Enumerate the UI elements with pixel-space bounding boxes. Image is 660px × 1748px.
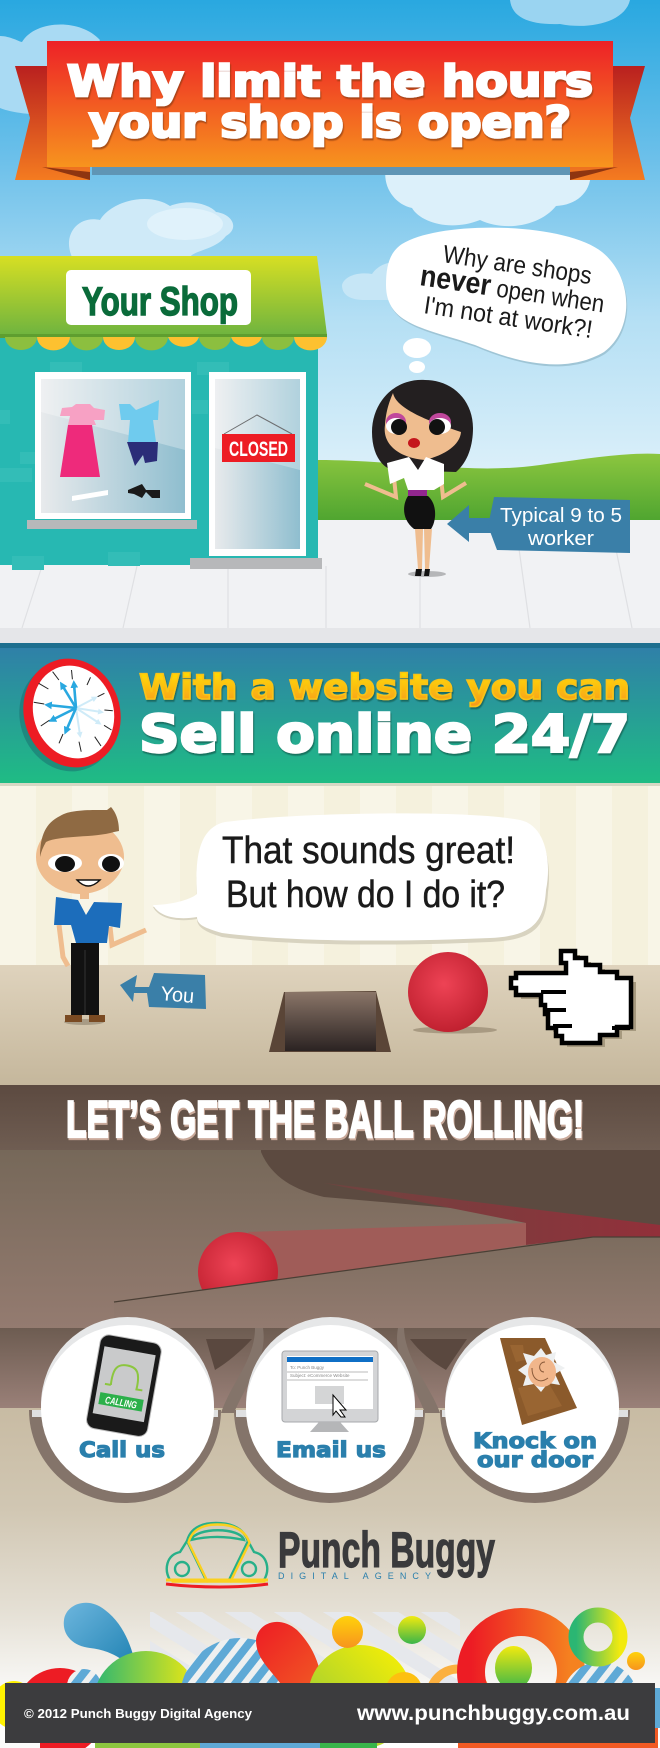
speech bubble bbox=[153, 813, 549, 945]
thought text: I'm not at work?! bbox=[422, 291, 594, 344]
icon: phone bbox=[85, 1334, 163, 1438]
icon: door with fist bbox=[500, 1338, 577, 1425]
decorative colourful shapes bbox=[0, 1603, 660, 1748]
section: get the ball rolling bbox=[0, 1085, 660, 1748]
callout: you bbox=[120, 973, 206, 1009]
grass hill bbox=[318, 454, 660, 525]
thought text: Why are shops bbox=[441, 240, 594, 290]
heading: Why limit the hours bbox=[67, 57, 593, 107]
icon: pixel hand cursor bbox=[511, 951, 636, 1047]
label: knock on our door: our door bbox=[477, 1448, 594, 1472]
speech text: That sounds great! bbox=[222, 830, 515, 872]
red ball bbox=[408, 952, 497, 1034]
funnels between circles bbox=[206, 1328, 467, 1413]
icon: beetle bbox=[166, 1523, 268, 1587]
copyright: © 2012 Punch Buggy Digital Agency bbox=[24, 1706, 253, 1721]
callout: typical 9 to 5 worker bbox=[447, 497, 630, 553]
website url: www.punchbuggy.com.au bbox=[356, 1702, 630, 1725]
logo: punch buggy bbox=[166, 1522, 495, 1587]
speech text bbox=[222, 830, 515, 916]
icon: monitor with email: Subject: eCommerce Website bbox=[290, 1373, 350, 1378]
footer bar bbox=[5, 1683, 655, 1743]
heading: with a website you can: With a website you can bbox=[139, 668, 630, 708]
panel: knock on our door bbox=[440, 1317, 630, 1503]
icon: shoes bbox=[128, 484, 160, 498]
callout: typical 9 to 5 worker: Typical 9 to 5 bbox=[500, 505, 622, 527]
title banner bbox=[15, 41, 645, 180]
logo tagline: DIGITAL AGENCY bbox=[278, 1571, 431, 1581]
heading: your shop is open? bbox=[89, 98, 571, 148]
heading bbox=[67, 57, 593, 148]
section: shop scene bbox=[0, 0, 660, 644]
shop sign: Your Shop bbox=[82, 280, 238, 324]
label: call us: Call us bbox=[79, 1438, 165, 1462]
clouds bbox=[0, 0, 630, 300]
awning bbox=[0, 256, 327, 350]
icon: phone: CALLING bbox=[104, 1395, 138, 1412]
character: woman worker bbox=[365, 380, 473, 577]
closed sign: CLOSED bbox=[229, 438, 288, 461]
icon: t-shirt and shorts bbox=[119, 400, 159, 466]
ball rolling trail bbox=[248, 1223, 526, 1280]
panel: call us bbox=[29, 1317, 221, 1503]
callout: you: You bbox=[160, 983, 195, 1008]
thought text: never open when bbox=[418, 259, 607, 319]
speech text: But how do I do it? bbox=[226, 874, 505, 916]
label: knock on our door bbox=[473, 1429, 597, 1472]
icon: belt bbox=[72, 490, 108, 501]
logo wordmark: Punch Buggy bbox=[278, 1522, 495, 1578]
shop sign bbox=[66, 270, 251, 325]
label: knock on our door: Knock on bbox=[473, 1429, 597, 1453]
lower ramp bbox=[114, 1237, 660, 1328]
shop window with clothes bbox=[27, 372, 197, 529]
rolling red ball bbox=[198, 1232, 278, 1290]
shop building bbox=[0, 256, 327, 570]
section: sell online banner bbox=[0, 643, 660, 786]
hole bbox=[269, 991, 391, 1052]
panel: email us bbox=[234, 1317, 425, 1503]
icon: clock bbox=[5, 646, 135, 784]
callout: typical 9 to 5 worker: worker bbox=[527, 528, 594, 550]
icon: monitor with email: To: Punch Buggy bbox=[290, 1365, 325, 1370]
icon: dress bbox=[60, 404, 105, 477]
sidewalk bbox=[0, 520, 660, 644]
closed sign bbox=[222, 415, 295, 462]
section: room scene bbox=[0, 786, 660, 1085]
thought text bbox=[418, 240, 607, 344]
character: man bbox=[36, 807, 146, 1025]
shop door bbox=[190, 372, 322, 569]
upper ramp bbox=[261, 1150, 660, 1245]
icon: monitor with email bbox=[282, 1351, 378, 1432]
heading: sell online 24/7: Sell online 24/7 bbox=[139, 705, 630, 765]
thought bubble bbox=[386, 228, 627, 373]
label: email us: Email us bbox=[276, 1438, 386, 1462]
